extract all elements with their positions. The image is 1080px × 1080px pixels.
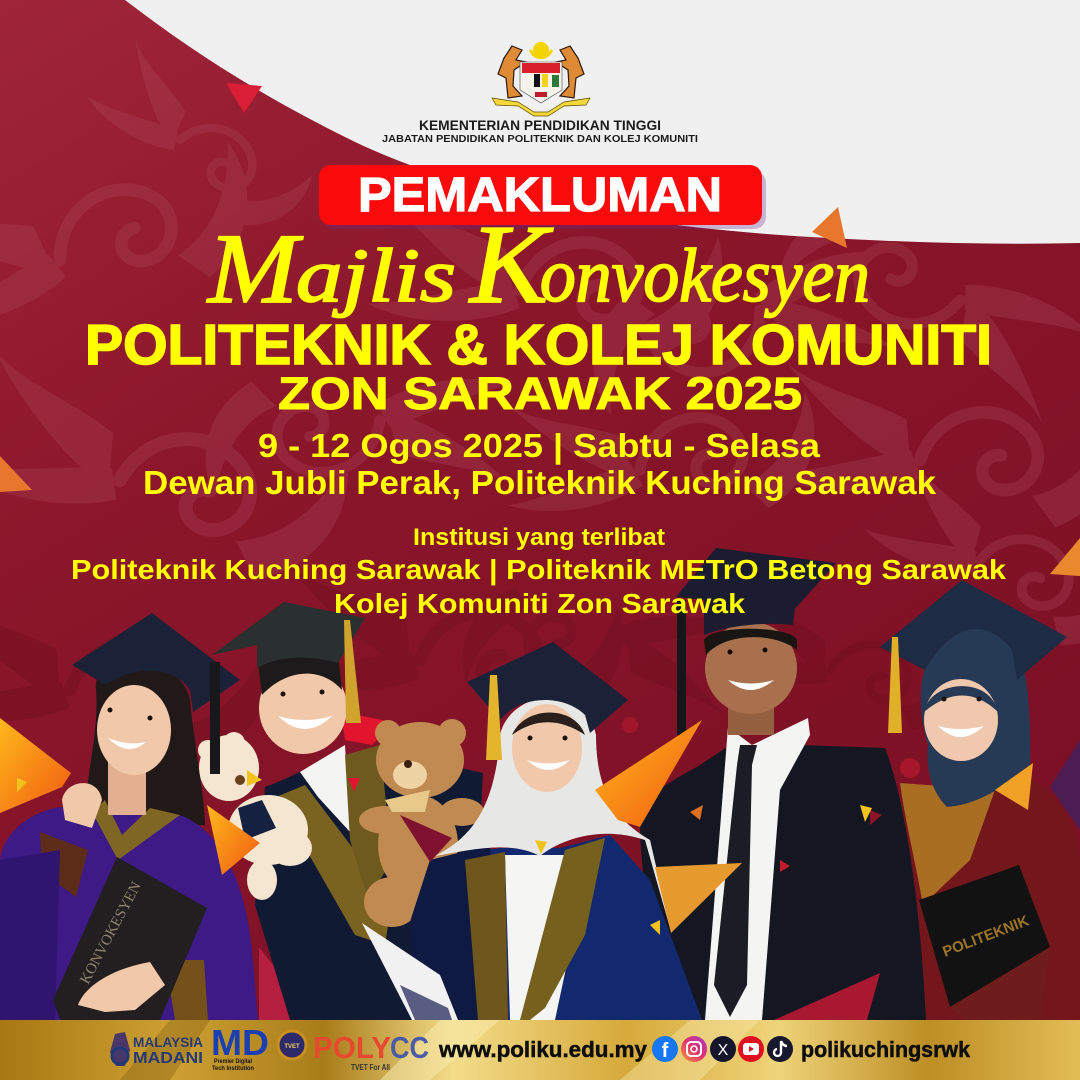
- announcement banner: PEMAKLUMAN: [358, 169, 722, 222]
- footer logo: Malaysia Madani: [110, 1032, 203, 1067]
- announcement banner: [319, 165, 766, 229]
- footer logo: POLYCC: [313, 1030, 429, 1072]
- department line: JABATAN PENDIDIKAN POLITEKNIK DAN KOLEJ KOMUNITI: [382, 133, 698, 145]
- icon: facebook: f: [662, 1040, 669, 1062]
- venue: Dewan Jubli Perak, Politeknik Kuching Sarawak: [143, 464, 937, 501]
- crest: crescent and star: [530, 42, 552, 58]
- teddy bear: brown: [359, 719, 484, 927]
- footer website: www.poliku.edu.my: [438, 1037, 648, 1062]
- script title: K: [468, 203, 554, 327]
- icon: X: X: [718, 1042, 729, 1059]
- footer social handle: polikuchingsrwk: [801, 1037, 971, 1062]
- triangles: foreground confetti: [17, 720, 1033, 1020]
- script title: [206, 203, 870, 327]
- script title: M: [206, 213, 303, 324]
- teddy bear: white: [198, 732, 312, 900]
- title text group: [71, 203, 1006, 619]
- graduate 3: centre, hijab and blue robe: [362, 642, 702, 1020]
- footer logo: MD: Tech Institution: [212, 1065, 254, 1072]
- footer logo: Malaysia Madani: MADANI: [133, 1050, 203, 1067]
- footer logo: MD: Premier Digital: [214, 1058, 252, 1065]
- icon: facebook: [652, 1036, 678, 1062]
- footer logo: POLYCC: POLY: [313, 1030, 391, 1065]
- script title: onvokesyen: [540, 234, 870, 318]
- icon: youtube: [738, 1036, 764, 1062]
- graduate 1: left, purple robe with folder: KONVOKESYEN: [77, 879, 145, 987]
- ornament pattern: [0, 32, 1080, 663]
- footer logo: Malaysia Madani: MALAYSIA: [133, 1034, 203, 1050]
- icon: X: [710, 1036, 736, 1062]
- footer logo: POLYCC: CC: [390, 1030, 429, 1065]
- crest: scroll: [492, 98, 590, 116]
- institutions list line 2: Kolej Komuniti Zon Sarawak: [334, 588, 745, 619]
- footer logo: TVET: [278, 1031, 306, 1059]
- footer logo: MD: MD: [211, 1022, 269, 1063]
- crest: shield: [520, 62, 562, 103]
- graduate 4: right centre, black robe and tie: [640, 548, 926, 1020]
- date: 9 - 12 Ogos 2025 | Sabtu - Selasa: [258, 427, 821, 464]
- footer logo: TVET: TVET: [284, 1044, 300, 1050]
- graduate 5: right, maroon robe and navy hijab: POLITEKNIK: [940, 912, 1031, 961]
- institutions heading: Institusi yang terlibat: [413, 524, 665, 551]
- footer logo: POLYCC: TVET For All: [351, 1063, 390, 1072]
- ministry line: KEMENTERIAN PENDIDIKAN TINGGI: [419, 118, 661, 133]
- icon: tiktok: [767, 1036, 793, 1062]
- icon: instagram: [681, 1036, 707, 1062]
- script title: ajlis: [296, 234, 456, 318]
- graduate 1: left, purple robe with folder: [0, 613, 258, 1020]
- crest: tigers: [498, 46, 584, 98]
- institutions list line 1: Politeknik Kuching Sarawak | Politeknik METrO Betong Sarawak: [71, 554, 1006, 585]
- government crest: [492, 42, 590, 116]
- footer bar: [0, 1020, 1080, 1080]
- graduate 2: left centre, navy robe with gold stole: [212, 602, 483, 1020]
- zone heading: ZON SARAWAK 2025: [278, 368, 802, 419]
- main heading: POLITEKNIK & KOLEJ KOMUNITI: [85, 313, 992, 377]
- graduate 5: right, maroon robe and navy hijab: [880, 580, 1080, 1020]
- ministry name: [382, 118, 698, 145]
